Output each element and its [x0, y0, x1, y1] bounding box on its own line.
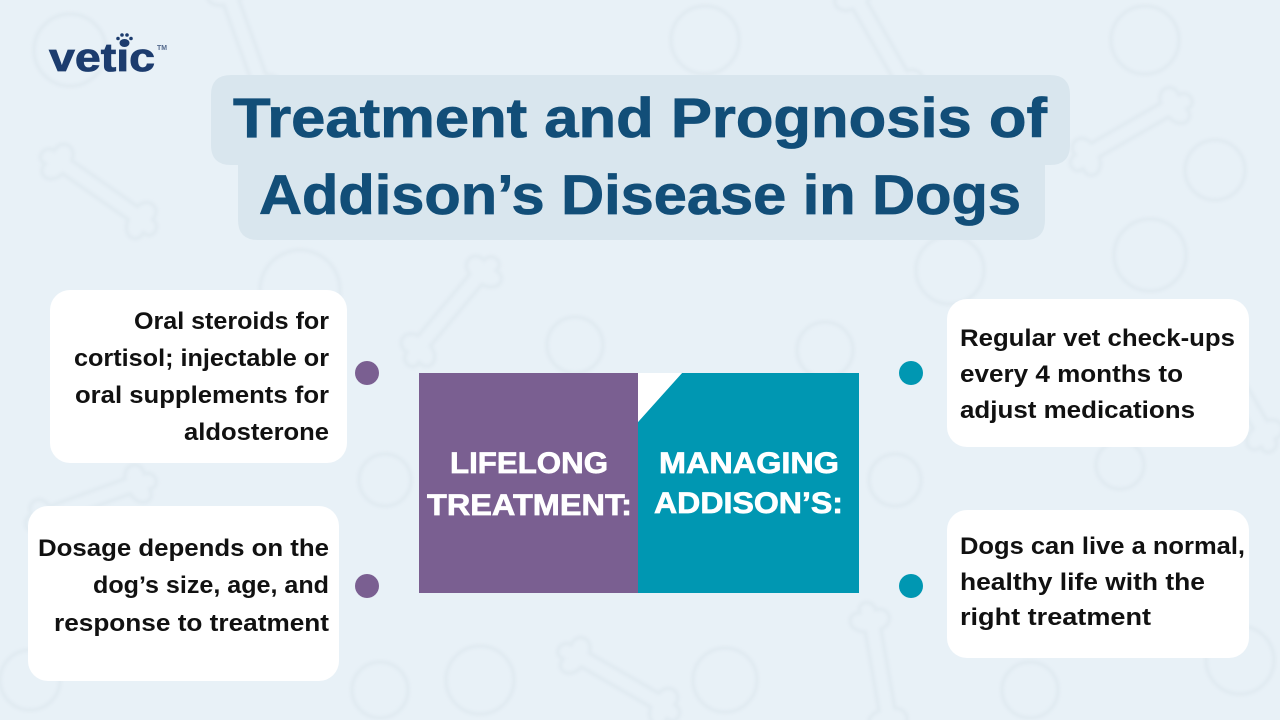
panel: normal life card — [947, 510, 1249, 658]
panel: oral steroids card: cortisol; injectable or — [74, 345, 329, 372]
panel: lifelong treatment — [419, 373, 638, 593]
panel: vet check-ups card — [947, 299, 1249, 447]
panel: dosage card: dog’s size, age, and — [93, 572, 329, 599]
dot: purple lower — [355, 574, 379, 598]
panel: managing addison's: ADDISON’S: — [654, 487, 843, 520]
panel: managing addison's: MANAGING — [659, 447, 839, 480]
panel: oral steroids card: oral supplements for — [75, 382, 329, 409]
panel: lifelong treatment: TREATMENT: — [427, 489, 632, 522]
panel: normal life card: healthy life with the — [960, 569, 1205, 596]
panel: vet check-ups card: every 4 months to — [960, 361, 1183, 388]
title: Addison’s Disease in Dogs — [259, 163, 1021, 226]
panel: managing addison's — [638, 373, 859, 593]
dot: purple upper — [355, 361, 379, 385]
dot: teal upper — [899, 361, 923, 385]
dot: teal lower — [899, 574, 923, 598]
panel: dosage card: response to treatment — [54, 610, 329, 637]
panel: vet check-ups card: adjust medications — [960, 397, 1195, 424]
panel: vet check-ups card: Regular vet check-ups — [960, 325, 1235, 352]
panel: lifelong treatment: LIFELONG — [450, 447, 608, 480]
title: Treatment and Prognosis of — [233, 86, 1047, 149]
panel: oral steroids card: Oral steroids for — [134, 308, 329, 335]
panel: normal life card: Dogs can live a normal, — [960, 533, 1245, 560]
panel: oral steroids card: aldosterone — [184, 419, 329, 446]
panel: dosage card: Dosage depends on the — [38, 535, 329, 562]
title — [211, 75, 1070, 240]
panel: dosage card — [28, 506, 339, 681]
panel: normal life card: right treatment — [960, 604, 1151, 631]
logo: vetic: TM — [157, 45, 167, 52]
icon: paw — [116, 33, 133, 47]
logo: vetic: vetic — [49, 36, 155, 80]
panel: oral steroids card — [50, 290, 347, 463]
